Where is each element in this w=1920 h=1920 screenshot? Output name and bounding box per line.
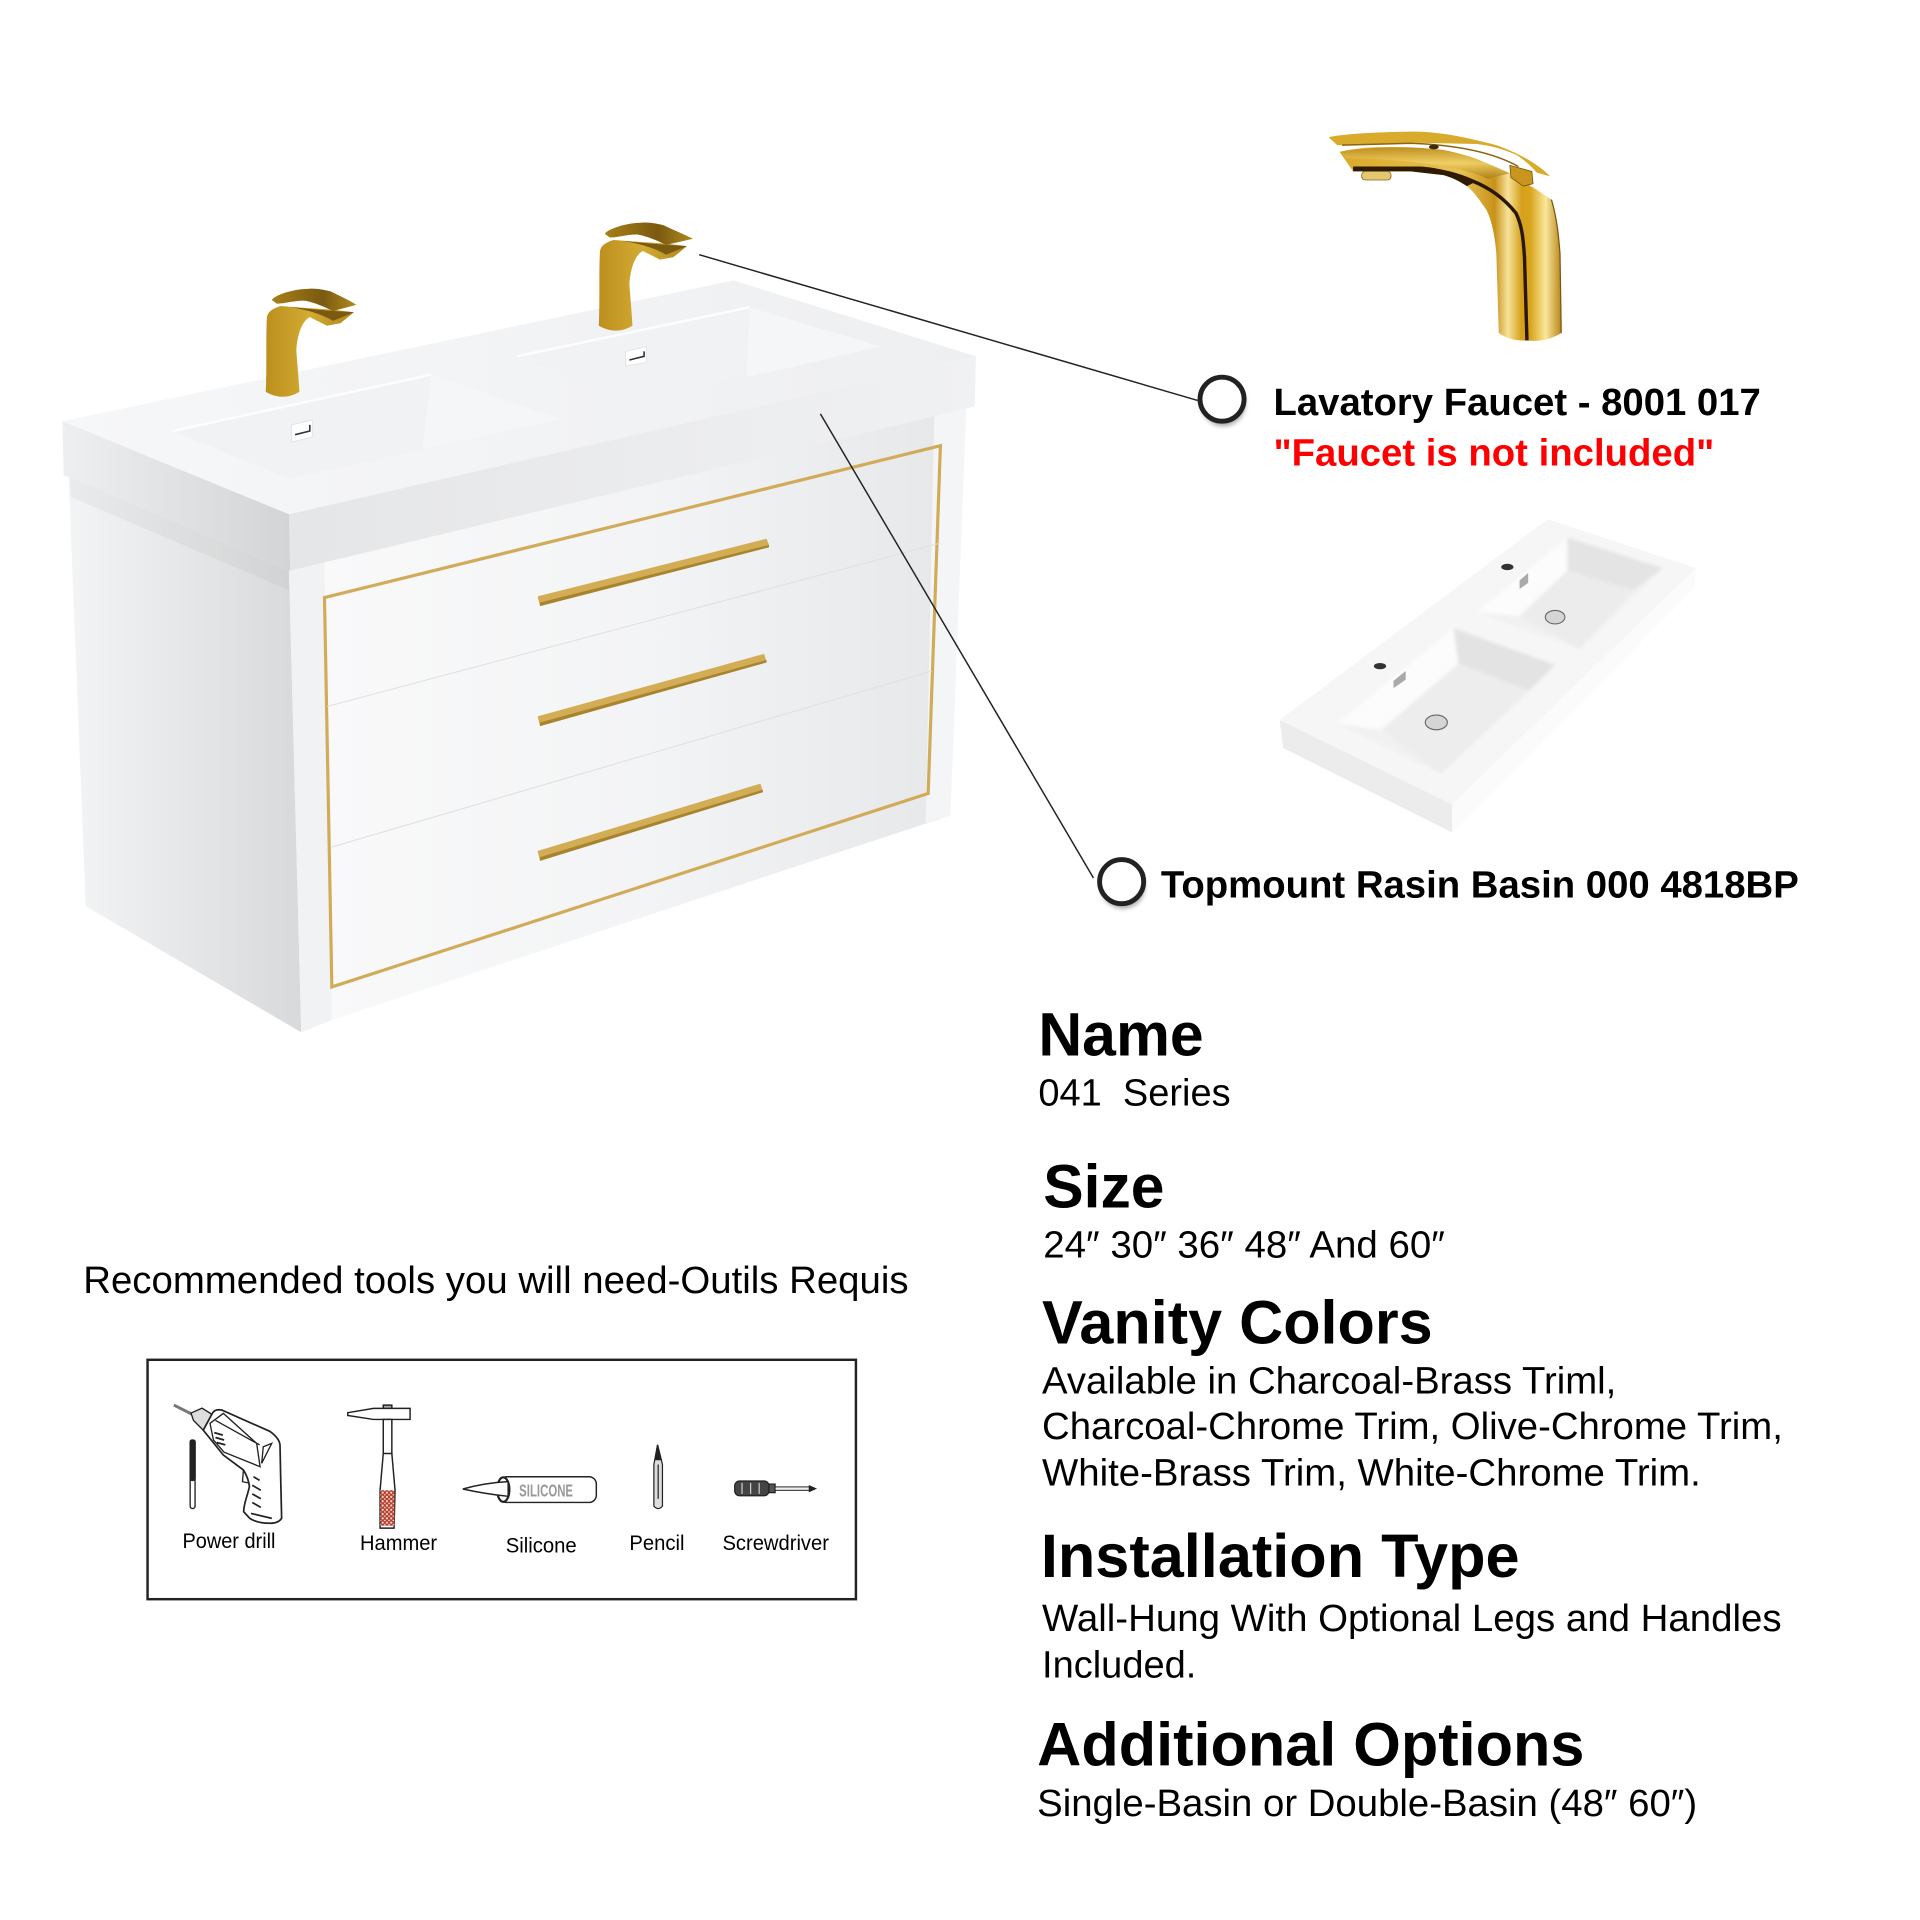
spec: installation type: Wall-Hung With Optional Legs and Handles [1042, 1598, 1782, 1640]
right faucet on vanity [599, 223, 693, 331]
marker circle: basin [1100, 860, 1145, 909]
icon: hammer [348, 1405, 410, 1528]
vanity countertop [62, 280, 976, 571]
spec: name [1038, 1001, 1231, 1115]
tool captions: Pencil [629, 1532, 684, 1555]
icon: silicone tube [463, 1477, 596, 1502]
icon: silicone tube: SILICONE [519, 1480, 573, 1500]
spec: additional options: Additional Options [1037, 1711, 1584, 1779]
drawer seam lines [327, 544, 938, 847]
icon: screwdriver [735, 1481, 816, 1496]
overflow tabs [291, 347, 647, 442]
spec: vanity colors [1042, 1288, 1783, 1494]
spec: vanity colors: White-Brass Trim, White-Chrome Trim. [1042, 1452, 1701, 1494]
product label: lavatory faucet: Lavatory Faucet - 8001 017 [1273, 382, 1761, 424]
tool captions: Power drill [182, 1530, 276, 1553]
spec: vanity colors: Vanity Colors [1042, 1288, 1433, 1356]
spec: vanity colors: Available in Charcoal-Brass Triml, [1042, 1360, 1616, 1402]
drawer gold frame [324, 446, 940, 987]
tool captions: Screwdriver [722, 1532, 829, 1555]
spec: name: 041 Series [1038, 1073, 1231, 1115]
spec: installation type: Installation Type [1041, 1522, 1520, 1590]
left faucet on vanity [266, 289, 356, 397]
spec: installation type: Included. [1042, 1645, 1196, 1687]
marker circle: faucet [1200, 377, 1245, 426]
product photo: double basin top [1280, 519, 1696, 833]
panel: tools box [148, 1360, 856, 1599]
heading: recommended tools: Recommended tools you will need-Outils Requis [83, 1260, 909, 1302]
spec: size: 24″ 30″ 36″ 48″ And 60″ [1043, 1225, 1445, 1267]
leader line: basin callout [820, 414, 1093, 878]
spec: additional options [1037, 1711, 1697, 1825]
spec: size [1043, 1152, 1445, 1267]
icon: pencil [654, 1445, 662, 1509]
right sink basin [517, 307, 880, 398]
vanity cabinet body [69, 407, 966, 1032]
spec: size: Size [1043, 1152, 1164, 1220]
icon: power drill [174, 1405, 282, 1523]
drawer handles [538, 539, 769, 861]
product label: topmount basin: Topmount Rasin Basin 000 4818BP [1161, 865, 1799, 907]
spec: vanity colors: Charcoal-Chrome Trim, Olive-Chrome Trim, [1042, 1406, 1783, 1448]
product photo: gold lavatory faucet [1329, 132, 1561, 341]
tool captions: Hammer [360, 1532, 437, 1555]
spec: additional options: Single-Basin or Double-Basin (48″ 60″) [1037, 1783, 1697, 1825]
spec: name: Name [1038, 1001, 1204, 1069]
tool captions [182, 1530, 829, 1558]
spec: installation type [1041, 1522, 1782, 1687]
illustration: white double-basin vanity [62, 223, 976, 1032]
leader line: faucet callout [699, 255, 1198, 400]
left sink basin [173, 375, 561, 479]
note: faucet not included: "Faucet is not included" [1273, 432, 1714, 474]
tool captions: Silicone [506, 1535, 577, 1558]
